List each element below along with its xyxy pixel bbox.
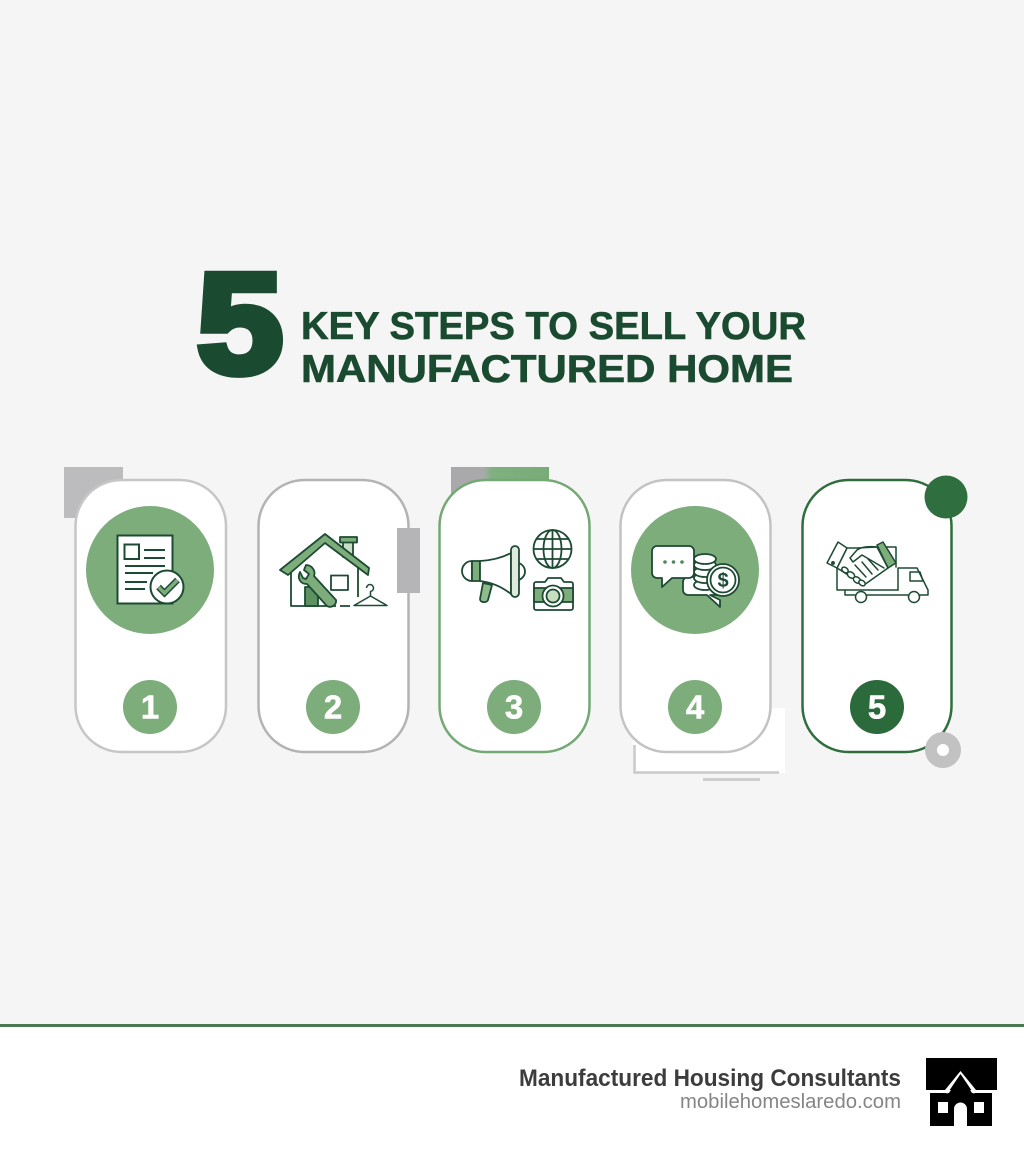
corner ring gray: [931, 738, 955, 762]
icon: house with wrench and hanger: [280, 534, 387, 607]
icon circle: [631, 506, 759, 634]
heading text: MANUFACTURED HOME: [301, 348, 793, 391]
icon: chat bubbles, coins and dollar: $: [717, 570, 729, 592]
title: [197, 244, 806, 404]
icon: globe: [534, 530, 572, 568]
step 5 card: [802, 476, 968, 762]
step badge 3: [487, 680, 541, 734]
heading text: KEY STEPS TO SELL YOUR: [301, 305, 806, 348]
card outline: [258, 480, 408, 752]
step badge 4: 4: [686, 688, 705, 726]
corner dot dark green: [924, 476, 968, 518]
step 2 card: [258, 480, 420, 752]
step 1 card: [64, 467, 226, 752]
decorative gray tab: [64, 467, 123, 518]
icon: camera: [534, 578, 573, 610]
logo: black house: [926, 1058, 997, 1126]
step badge 2: [306, 680, 360, 734]
icon: chat bubbles, coins and dollar: [652, 546, 739, 607]
decorative gray tab: [397, 528, 420, 593]
big numeral 5: 5: [197, 244, 283, 404]
icon: megaphone: [462, 546, 525, 602]
card outline: [802, 480, 952, 752]
step 3 card: [440, 467, 590, 752]
icon: handshake and delivery truck: [827, 542, 928, 602]
step badge 1: 1: [141, 688, 159, 726]
step badge 5: 5: [868, 688, 886, 726]
card outline: [76, 480, 226, 752]
step badge 5: [850, 680, 904, 734]
step badge 1: [123, 680, 177, 734]
website url: mobilehomeslaredo.com: [680, 1091, 901, 1113]
step badge 3: 3: [505, 688, 523, 726]
company name: Manufactured Housing Consultants: [519, 1065, 901, 1092]
step badge 4: [668, 680, 722, 734]
decorative gradient tab: [451, 467, 549, 497]
card outline: [620, 480, 770, 752]
icon: checklist document: [118, 536, 184, 604]
heading text: [301, 305, 806, 391]
step badge 2: 2: [324, 688, 342, 726]
step 4 card: [620, 480, 785, 781]
card outline: [440, 480, 590, 752]
back paper sheet: [633, 708, 785, 781]
icon circle: [86, 506, 214, 634]
footer band: [0, 1024, 1024, 1154]
